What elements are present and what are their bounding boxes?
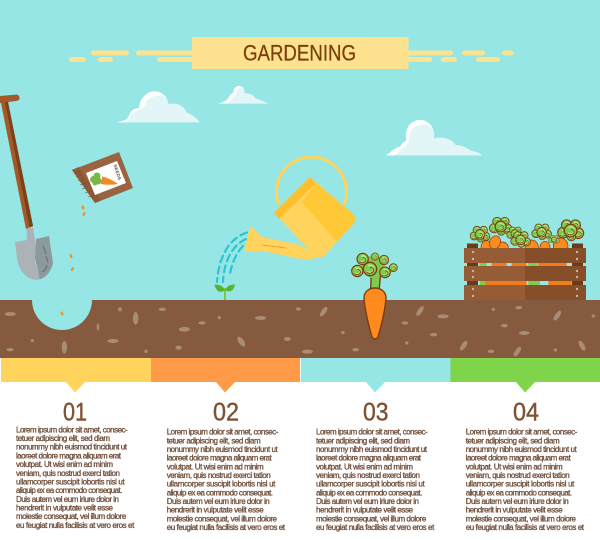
step 4 text: eu feugiat nulla facilisis at vero eros et — [466, 523, 585, 532]
crate contents behind — [470, 217, 584, 286]
packet greens — [90, 172, 102, 186]
step 3 bar — [301, 358, 451, 392]
step 4 text: volutpat. Ut wisi enim ad minim — [466, 462, 563, 471]
step 3 text: laoreet dolore magna aliquam erat — [316, 454, 422, 463]
step 3 number: 03 — [363, 399, 388, 427]
step 4 column — [450, 358, 600, 532]
step 4 text: nonummy nibh euismod tincidunt ut — [466, 445, 577, 454]
soil ground — [0, 300, 600, 358]
step 3 text: molestie consequat, vel illum dolore — [316, 514, 427, 523]
step 4 number: 04 — [513, 399, 539, 427]
cloud 3 — [386, 120, 482, 155]
step 2 text: tetuer adipiscing elit, sed diam — [167, 436, 261, 445]
shovel handle — [0, 94, 33, 229]
can body — [274, 177, 355, 258]
step 2 text: ullamcorper suscipit lobortis nisl ut — [167, 480, 276, 489]
step 1 text: nonummy nibh euismod tincidunt ut — [16, 443, 128, 452]
watering can — [244, 157, 355, 260]
packet ribbed edge — [72, 167, 101, 203]
step 4 text: Duis autem vel eum iriure dolor in — [466, 497, 569, 506]
step 3 text: volutpat. Ut wisi enim ad minim — [316, 462, 413, 471]
shovel blade light side — [15, 228, 40, 280]
step 3 text: eu feugiat nulla facilisis at vero eros et — [316, 523, 435, 532]
crate back carrots — [481, 238, 568, 255]
crate rivets — [472, 251, 578, 297]
step 1 number: 01 — [63, 399, 87, 427]
title banner — [69, 37, 514, 69]
soil pebbles left — [5, 307, 301, 354]
can spout — [262, 237, 320, 260]
shovel blade dark side — [35, 236, 53, 280]
sprout — [214, 284, 235, 300]
step 2 text: nonummy nibh euismod tincidunt ut — [167, 445, 278, 454]
step 1 text — [16, 425, 135, 530]
step 2 text: Lorem ipsum dolor sit amet, consec- — [167, 428, 279, 437]
can spout line — [262, 245, 287, 248]
step 1 text: veniam, quis nostrud exerci tation — [16, 469, 120, 478]
step 3 text: Duis autem vel eum iriure dolor in — [316, 497, 419, 506]
can body shade — [302, 183, 355, 242]
packet carrot — [101, 176, 118, 185]
can rose — [244, 226, 262, 252]
step 1 text: ullamcorper suscipit lobortis nisl ut — [16, 477, 125, 486]
step 2 text: eu feugiat nulla facilisis at vero eros et — [167, 523, 286, 532]
step 3 text: veniam, quis nostrud exerci tation — [316, 471, 420, 480]
step 4 text: veniam, quis nostrud exerci tation — [466, 471, 570, 480]
step 1 column — [1, 358, 151, 530]
soil pebbles right — [302, 305, 595, 358]
crate of carrots — [464, 217, 586, 300]
step 1 text: hendrerit in vulputate velit esse — [16, 503, 114, 512]
step 4 text: ullamcorper suscipit lobortis nisl ut — [466, 480, 575, 489]
crate carrots between slats — [485, 263, 572, 286]
step 4 text: tetuer adipiscing elit, sed diam — [466, 436, 560, 445]
cloud 1 — [117, 91, 200, 122]
title: GARDENING — [243, 41, 356, 66]
packet body — [72, 152, 133, 203]
falling seeds — [60, 205, 86, 316]
step 3 text: aliquip ex ea commodo consequat. — [316, 488, 422, 497]
step 2 column — [151, 358, 300, 532]
shovel — [0, 94, 53, 280]
step 2 text: volutpat. Ut wisi enim ad minim — [167, 462, 264, 471]
step 1 text: volutpat. Ut wisi enim ad minim — [16, 460, 113, 469]
banner streaks right — [404, 50, 514, 62]
soil — [0, 300, 600, 358]
cloud 2 — [218, 86, 269, 104]
crate leaf clusters — [470, 217, 584, 247]
step 1 bar — [1, 358, 151, 392]
packet label — [86, 161, 126, 195]
sprout stem — [224, 288, 226, 300]
carrot in ground — [352, 253, 397, 339]
banner streaks left — [69, 50, 196, 62]
crate posts — [467, 244, 583, 300]
step 3 text: nonummy nibh euismod tincidunt ut — [316, 445, 428, 454]
water stream — [217, 232, 247, 282]
step 3 text: ullamcorper suscipit lobortis nisl ut — [316, 480, 425, 489]
seed packet — [72, 152, 133, 203]
step 2 text — [167, 428, 286, 532]
step 1 text: Duis autem vel eum iriure dolor in — [16, 495, 119, 504]
crate carrot on top of leaves — [488, 234, 502, 250]
crate slats dark — [525, 248, 586, 300]
step 3 column — [301, 358, 451, 532]
banner plate — [192, 37, 408, 69]
sprout leaves — [214, 284, 225, 292]
step 4 text: aliquip ex ea commodo consequat. — [466, 488, 572, 497]
step 4 text: hendrerit in vulputate velit esse — [466, 506, 563, 515]
step 4 text: Lorem ipsum dolor sit amet, consec- — [466, 428, 578, 437]
step 4 bar — [450, 358, 600, 392]
step 2 text: molestie consequat, vel illum dolore — [167, 514, 278, 523]
step 2 text: hendrerit in vulputate velit esse — [167, 506, 264, 515]
step 4 text: molestie consequat, vel illum dolore — [466, 514, 577, 523]
step 2 number: 02 — [213, 399, 239, 427]
crate greens between slats — [479, 263, 540, 286]
step 1 text: aliquip ex ea commodo consequat. — [16, 486, 122, 495]
step 2 bar — [151, 358, 300, 392]
can handle — [276, 157, 346, 205]
packet seeds label: SEEDS — [113, 164, 122, 181]
sky background — [0, 0, 600, 358]
step 4 text: laoreet dolore magna aliquam erat — [466, 454, 571, 463]
step 2 text: Duis autem vel eum iriure dolor in — [167, 497, 270, 506]
step 3 text: hendrerit in vulputate velit esse — [316, 506, 414, 515]
step 3 text: tetuer adipiscing elit, sed diam — [316, 436, 410, 445]
step 1 text: eu feugiat nulla facilisis at vero eros et — [16, 521, 135, 530]
step 1 text: Lorem ipsum dolor sit amet, consec- — [16, 425, 128, 434]
step 4 text — [466, 428, 585, 532]
step 2 text: veniam, quis nostrud exerci tation — [167, 471, 271, 480]
step 2 text: aliquip ex ea commodo consequat. — [167, 488, 273, 497]
crate slats light — [464, 248, 525, 300]
carrot root — [364, 288, 386, 339]
step 1 text: molestie consequat, vel illum dolore — [16, 512, 127, 521]
can rim band — [274, 177, 316, 219]
step 1 text: tetuer adipiscing elit, sed diam — [16, 434, 110, 443]
step 3 text — [316, 428, 435, 532]
step 3 text: Lorem ipsum dolor sit amet, consec- — [316, 428, 428, 437]
carrot leaves — [352, 253, 397, 288]
step 1 text: laoreet dolore magna aliquam erat — [16, 451, 122, 460]
step 2 text: laoreet dolore magna aliquam erat — [167, 454, 272, 463]
